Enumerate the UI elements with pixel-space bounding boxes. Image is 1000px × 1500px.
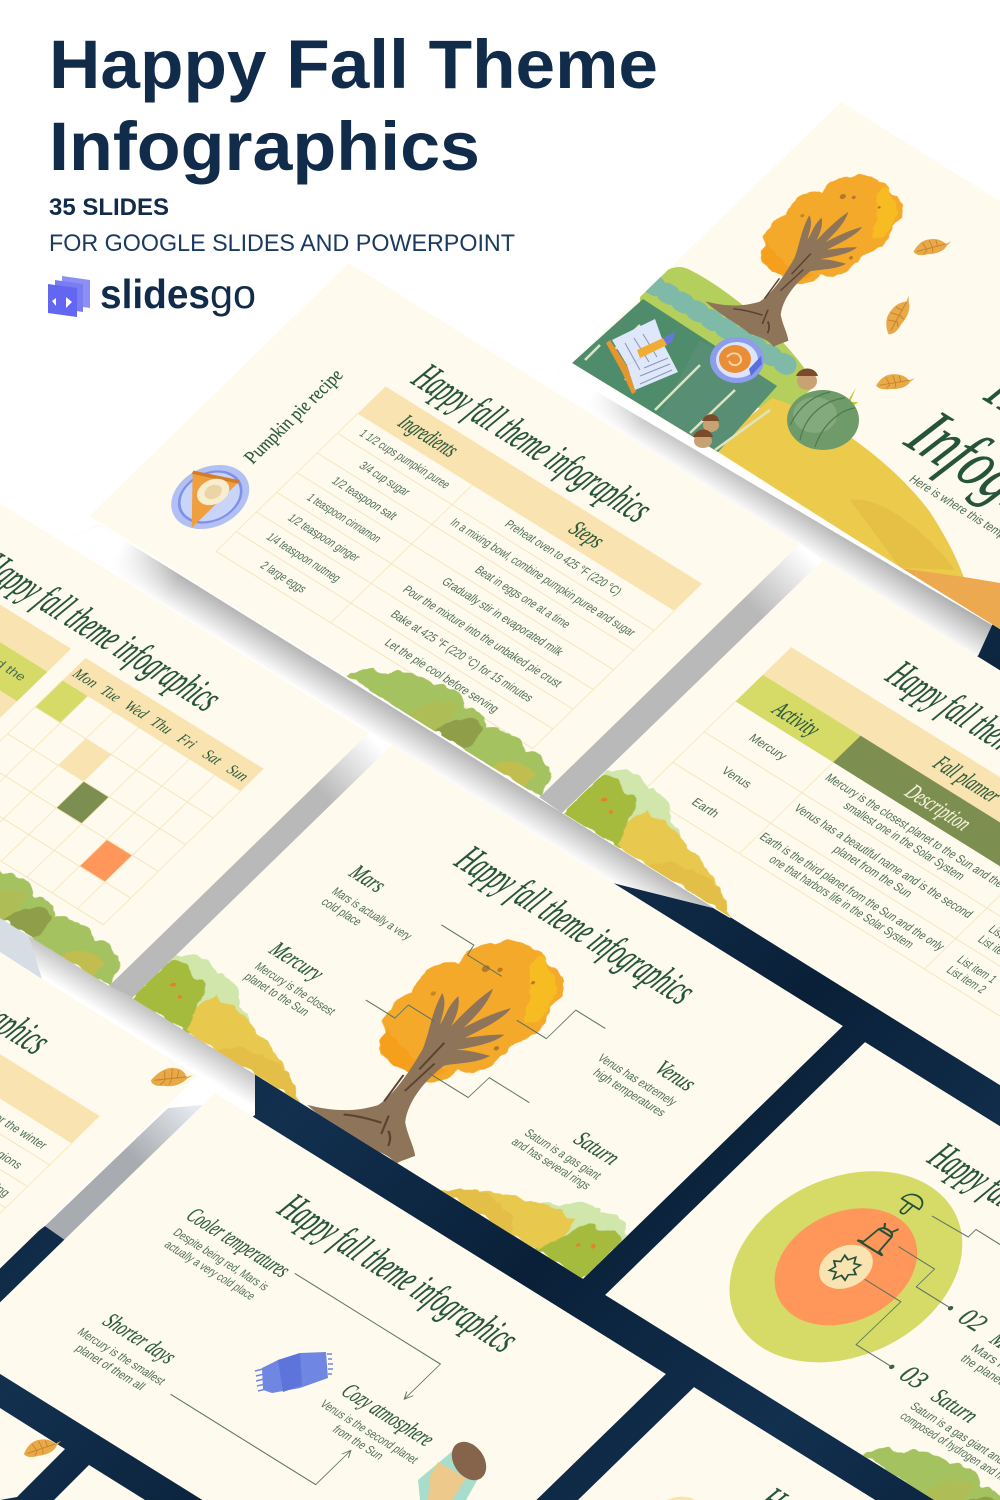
slide: rings diagram: [605, 1042, 1000, 1500]
slide: scarf and cozy topics: [0, 1093, 666, 1500]
list items column: List item 2: [943, 964, 989, 996]
activity column: Earth: [688, 796, 722, 820]
calendar cell: orange: [80, 839, 132, 882]
icon: mushroom: [892, 1191, 927, 1218]
steps list: Bake at 425 °F (220 °C) for 15 minutes: [387, 608, 536, 705]
shadow: start fade of cover slide shadow: [540, 370, 650, 450]
decoration: bushes: [862, 1422, 1000, 1500]
connector: Saturn: [429, 1053, 529, 1123]
icon: falling leaf 2: [879, 292, 918, 337]
shadow: start fade of recipe slide shadow: [60, 525, 180, 613]
left table wheat row: [0, 691, 17, 718]
decoration: left hill and bushes: [132, 947, 352, 1102]
slide count: 35 SLIDES: [49, 194, 169, 221]
logo wordmark: slidesgo: [100, 271, 256, 317]
ingredients list: 1/2 teaspoon salt: [329, 475, 400, 523]
steps list: Pour the mixture into the unbaked pie crust: [399, 583, 565, 690]
calendar header band: [62, 658, 264, 791]
label: Mars: Mars: [343, 859, 393, 897]
activity column: [692, 734, 787, 818]
steps list: In a mixing bowl, combine pumpkin puree and sugar: [447, 516, 639, 639]
label: 03 Saturn: Saturn: [926, 1384, 985, 1427]
shadow: gutter between table and scarf slides: [45, 1105, 204, 1240]
topic: Cozy atmosphere: Cozy atmosphere: [336, 1378, 441, 1451]
ingredients list: 1/2 teaspoon ginger: [285, 512, 363, 564]
label: Mercury: planet to the Sun: [241, 971, 312, 1019]
ingredients list: 2 large eggs: [257, 559, 310, 596]
slide: cover: [572, 102, 1000, 630]
label: Mars: Mars is actually a very: [329, 885, 415, 943]
topic: Shorter days: planet of them all: [72, 1342, 148, 1393]
label: Mercury: [239, 936, 362, 1028]
label: Venus: [583, 1030, 703, 1119]
table grid: [642, 701, 1000, 1030]
label: 02 Mars: 02: [952, 1303, 994, 1337]
icon: falling leaf 1: [912, 236, 953, 256]
ingredients list: 1/4 teaspoon nutmeg: [263, 531, 344, 585]
ring chart: [681, 1135, 1000, 1398]
calendar grid: [0, 680, 241, 925]
table text: [0, 1083, 57, 1199]
icon: corner leaf: [149, 1067, 195, 1087]
icon: tree stump: [857, 1218, 905, 1256]
connector: Mars: [433, 925, 510, 976]
icon: corner leaf bottom left: [22, 1435, 63, 1459]
slide: tree with planets: [130, 745, 843, 1281]
slide: calendar: [0, 452, 369, 986]
label: Saturn: Saturn is a gas giant: [521, 1127, 605, 1182]
topic: Cozy atmosphere: from the Sun: [329, 1423, 387, 1462]
table column headings: Ingredients: [392, 409, 465, 462]
topic: Cooler temperatures: Despite being red, Mars is: [170, 1226, 272, 1293]
label: Venus: high temperatures: [590, 1067, 669, 1119]
arrow: cooler to cozy: [259, 1273, 444, 1401]
cover scenery: [572, 156, 1000, 640]
connector: Venus: [517, 992, 605, 1057]
table header band: [0, 1054, 100, 1144]
side label: Pumpkin pie recipe: [237, 366, 348, 467]
slide title: Happy fall theme infographics: [402, 355, 664, 530]
list items column: [946, 925, 1000, 994]
arrow: shorter to cozy: [171, 1360, 354, 1487]
icon: coffee cup on saucer: [710, 337, 764, 383]
label: 03 Saturn: [871, 1360, 1000, 1499]
calendar weekday labels: Fri: [172, 731, 200, 752]
label: Mercury: Mercury: [263, 936, 331, 985]
calendar weekday labels: Tue: [96, 683, 125, 706]
subtitle: FOR GOOGLE SLIDES AND POWERPOINT: [49, 230, 515, 257]
topic: Shorter days: [63, 1303, 192, 1399]
calendar cell: green: [35, 680, 88, 723]
steps list: Gradually stir in evaporated milk: [438, 575, 566, 659]
recipe table grid: [216, 414, 674, 749]
label: Saturn: Saturn: [568, 1126, 626, 1169]
steps list: [384, 518, 636, 714]
icon: blue scarf: [255, 1352, 333, 1393]
table header band: [358, 386, 702, 611]
label: Venus: Venus: [649, 1055, 703, 1095]
calendar weekday labels: Sat: [198, 747, 226, 769]
logo icon: [48, 276, 90, 317]
slide: fall planner table: [563, 560, 1000, 1094]
shadow: under recipe and planner slides: [60, 525, 730, 918]
connector: third ring: [818, 1279, 938, 1370]
description column: one that harbors life in the Solar System: [766, 853, 917, 951]
illustration: autumn tree: [292, 916, 592, 1170]
icon: acorns: [693, 368, 818, 448]
table headings: Activity: [766, 696, 827, 741]
decoration: bushes: [0, 871, 121, 986]
description column: planet from the Sun: [830, 843, 915, 900]
label: Saturn: [508, 1104, 627, 1193]
topic: Cooler temperatures: actually a very cold place: [161, 1239, 258, 1303]
calendar weekday labels: Thu: [146, 715, 176, 738]
decoration: right hill and bushes: [440, 1139, 635, 1279]
label: Saturn: and has several rings: [508, 1136, 594, 1192]
ingredients list: 1 1/2 cups pumpkin puree: [356, 427, 453, 491]
calendar weekday labels: Mon: [68, 666, 102, 691]
wheat circle: [635, 1488, 715, 1500]
slide: pumpkin pie recipe: [89, 263, 800, 797]
connector: first ring: [932, 1208, 1000, 1253]
activity column: Mercury: [746, 732, 790, 763]
ingredients list: 3/4 cup sugar: [356, 459, 413, 499]
main title: [49, 26, 658, 185]
background: navy gutters: [0, 620, 1000, 1500]
icon: maple leaf: [822, 1250, 867, 1286]
table headings: Description: [899, 779, 978, 835]
calendar weekday labels: [68, 666, 252, 785]
ingredients list: [260, 430, 449, 592]
table grid: [0, 1001, 72, 1251]
topic: Cozy atmosphere: Venus is the second planet: [317, 1398, 422, 1467]
icon: open book: [606, 319, 678, 394]
table column headings: [396, 414, 603, 548]
connector: second ring: [878, 1246, 971, 1311]
topic: Cozy atmosphere: [306, 1375, 445, 1477]
slide title: Happy fall theme infographics: [445, 837, 707, 1012]
slide title: Happy fall theme infographics: [268, 1185, 530, 1360]
topic: Cooler temperatures: [157, 1203, 297, 1306]
label: Mars: [316, 859, 441, 953]
shadow: under cover slide: [540, 370, 992, 656]
main title: Happy Fall Theme: [49, 26, 658, 103]
calendar cell: wheat: [58, 739, 111, 781]
decoration: hill and bushes: [564, 769, 731, 918]
label: Mercury: Mercury is the closest: [252, 960, 339, 1018]
table column headings: Steps: [563, 516, 611, 553]
ingredients list: 1 teaspoon cinnamon: [304, 491, 384, 545]
icon: takeaway coffee cup: [418, 1435, 493, 1500]
label: Venus: Venus has extremely: [594, 1052, 680, 1109]
decoration: bushes: [346, 668, 552, 796]
steps list: Beat in eggs one at a time: [472, 564, 573, 631]
description header cell: [833, 736, 1000, 866]
steps list: Preheat oven to 425 °F (220 °C): [502, 518, 624, 598]
description column: Earth is the third planet from the Sun and the only: [756, 830, 948, 953]
cover text: [878, 339, 1000, 643]
activity header cell: [735, 675, 861, 762]
description column: smallest one in the Solar System: [840, 800, 968, 883]
topic: Cooler temperatures: Cooler temperatures: [181, 1203, 297, 1282]
label: 03 Saturn: 03: [893, 1360, 936, 1394]
logo: slidesgo: [48, 271, 256, 317]
calendar weekday labels: Sun: [223, 762, 252, 785]
icon: falling leaf 3: [876, 373, 915, 390]
label: Mars: cold place: [318, 896, 365, 928]
calendar weekday labels: Wed: [120, 698, 152, 723]
slide: leaf and table, lower left: [0, 953, 198, 1268]
calendar cell: olive: [56, 781, 109, 824]
planner header band: [763, 647, 1000, 822]
description column: [760, 773, 1000, 951]
topic: Shorter days: Shorter days: [98, 1308, 183, 1368]
shadow: gutter between recipe and planner slides: [539, 542, 823, 813]
slide: partial bottom left corner: [0, 1408, 65, 1500]
shadow: gutter between calendar and tree slides: [108, 732, 392, 998]
slide: partial bottom centre-left: [54, 1465, 145, 1500]
table headings: [770, 704, 1000, 831]
connector: Mercury: [366, 987, 435, 1034]
slide: partial bottom right: [434, 1387, 1000, 1500]
main title: Infographics: [49, 108, 480, 185]
steps list: Let the pie cool before serving: [381, 637, 502, 715]
shadow: pale wedge under calendar slide: [0, 918, 42, 979]
icon: pie slice on plate: [171, 465, 250, 529]
left table green row: [0, 642, 48, 702]
left table band: [0, 604, 71, 672]
activity column: Venus: [718, 764, 755, 791]
shadow: under calendar and tree slides: [0, 895, 255, 1115]
label: 02 Mars: [931, 1303, 1000, 1421]
icon: green pumpkin: [787, 388, 859, 450]
description column: Venus has a beautiful name and is the second: [791, 802, 976, 921]
topic: Shorter days: Mercury is the smallest: [74, 1326, 169, 1388]
